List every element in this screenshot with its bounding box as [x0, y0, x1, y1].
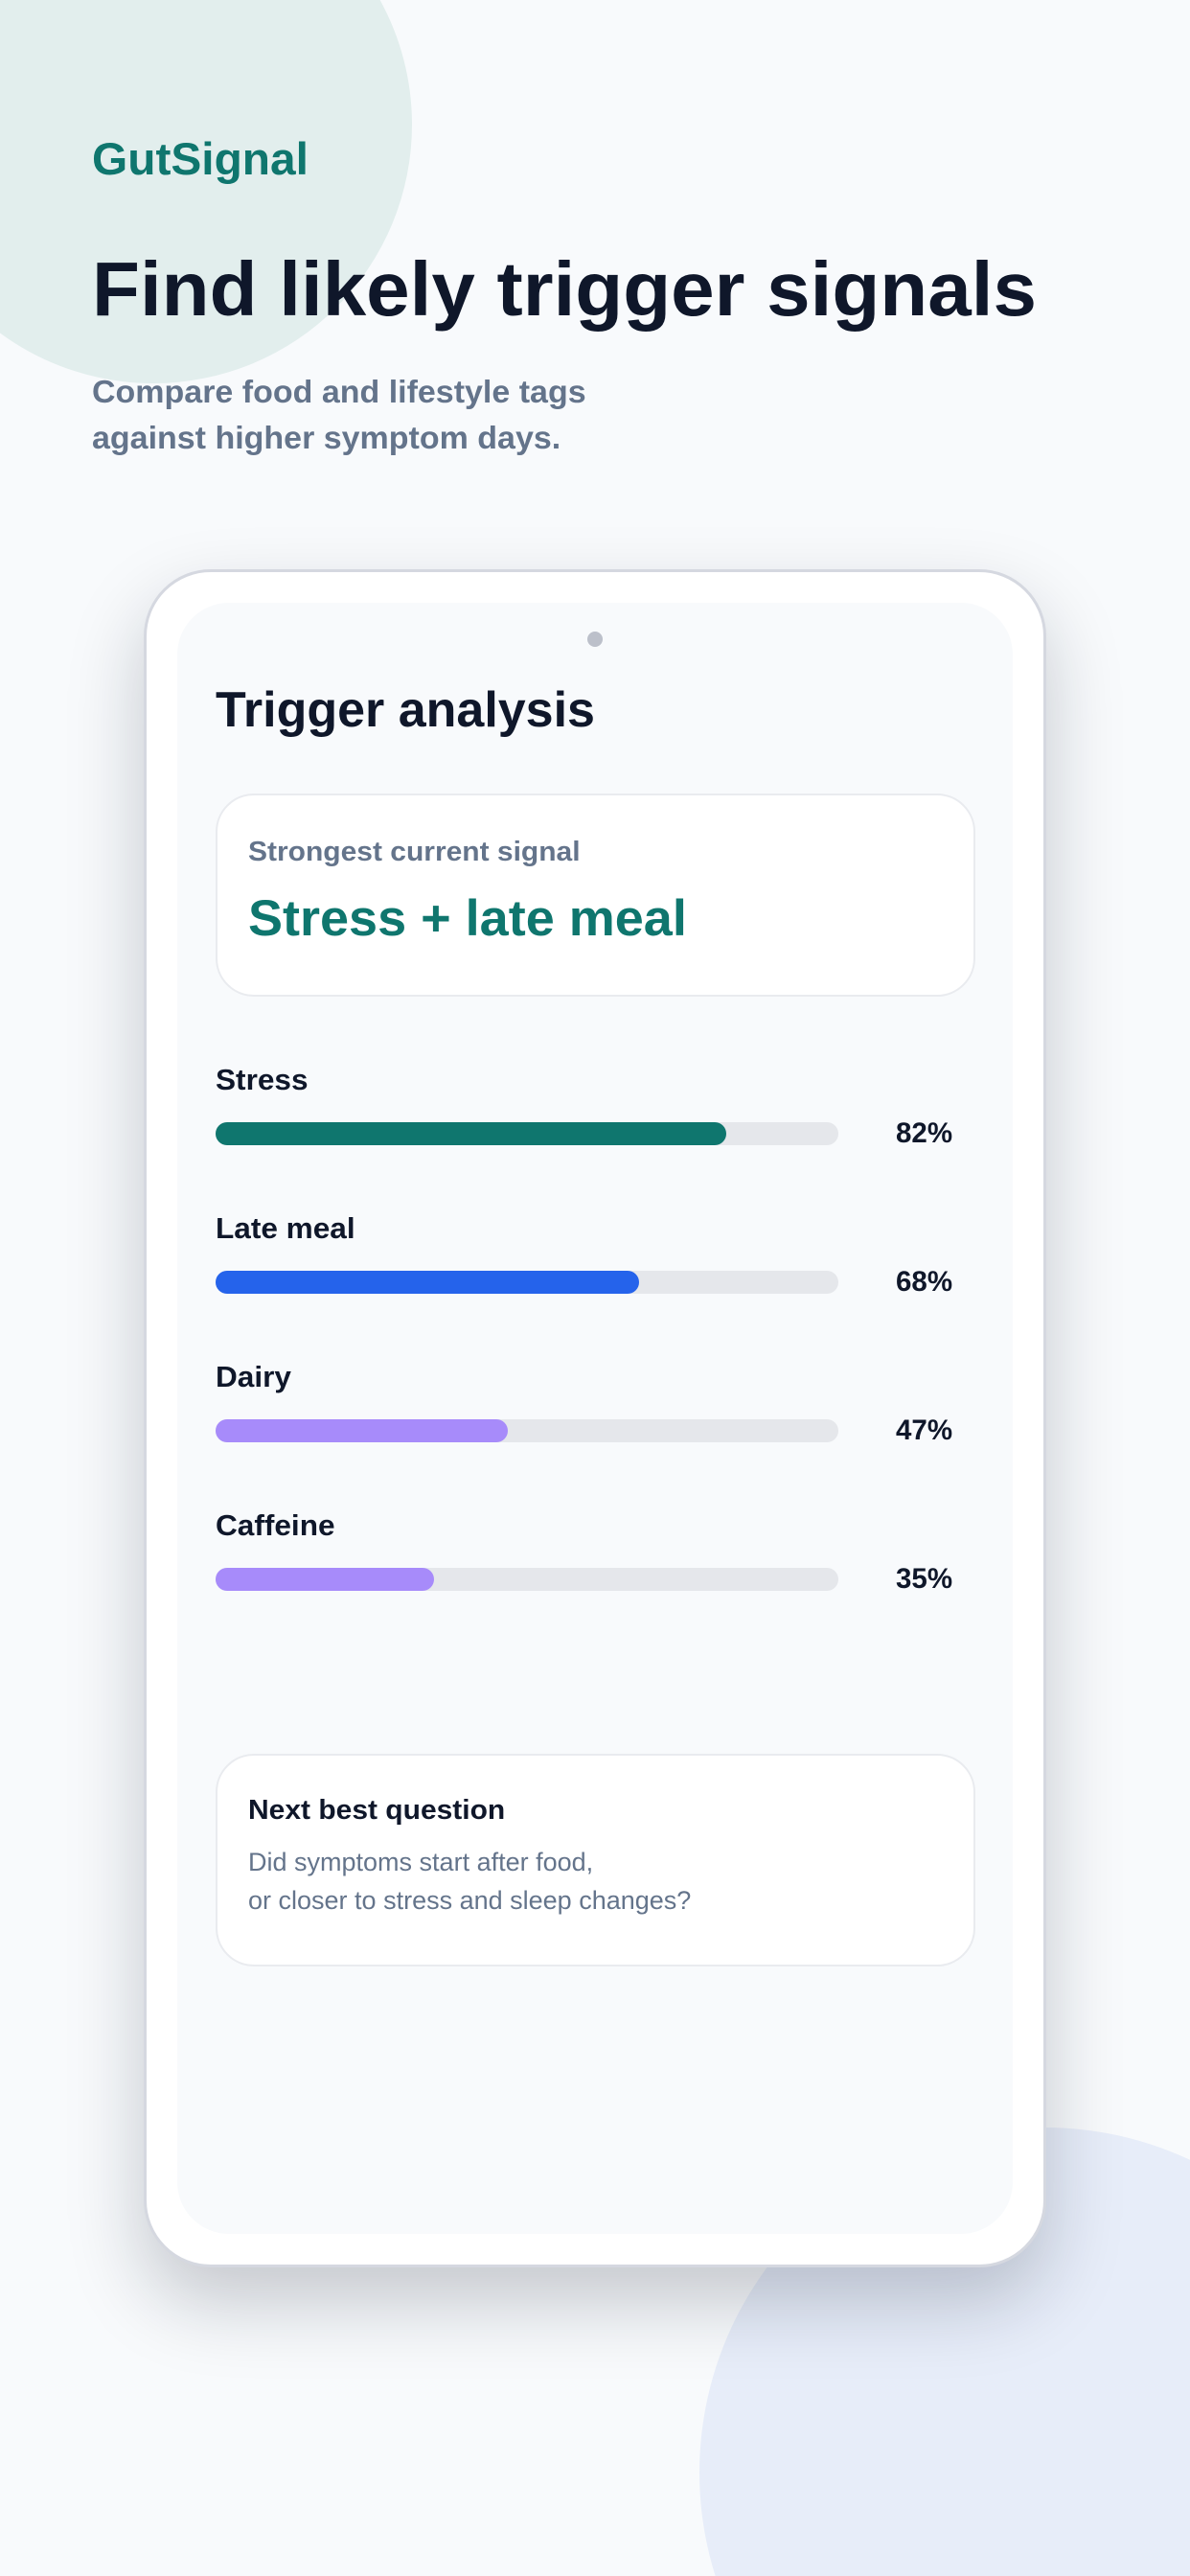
- card: strongest signal: [216, 794, 975, 997]
- bar row: Late meal: 68%: [896, 1266, 952, 1298]
- bar row: Dairy: 47%: [896, 1414, 952, 1446]
- bar row: Dairy: Dairy: [216, 1361, 291, 1393]
- decorative circle: bottom right: [699, 2128, 1190, 2576]
- bar row: Late meal: Late meal: [216, 1212, 355, 1245]
- question body: Did symptoms start after food,: [248, 1848, 593, 1876]
- panel: phone screen: [177, 603, 1013, 2234]
- bar row: Stress: [216, 1064, 952, 1149]
- subtitle: Compare food and lifestyle tags: [92, 374, 586, 409]
- bar row: Caffeine: 35%: [896, 1563, 952, 1595]
- screen heading: Trigger analysis: [216, 682, 595, 738]
- question body: [248, 1848, 691, 1915]
- bar row: Stress: 82%: [896, 1117, 952, 1149]
- brand name: GutSignal: [92, 133, 309, 184]
- bar chart: trigger signals: [216, 1064, 952, 1595]
- bar row: Dairy: [216, 1361, 952, 1446]
- panel: phone frame: [144, 569, 1046, 2267]
- subtitle: against higher symptom days.: [92, 420, 561, 455]
- question body: or closer to stress and sleep changes?: [248, 1886, 691, 1915]
- bar row: Stress: Stress: [216, 1064, 309, 1096]
- title: Find likely trigger signals: [92, 246, 1037, 332]
- decorative circle: top left: [0, 0, 412, 383]
- question heading: Next best question: [248, 1795, 505, 1826]
- bar row: Caffeine: Caffeine: [216, 1509, 335, 1542]
- card: next best question: [216, 1754, 975, 1966]
- camera dot: [587, 632, 603, 647]
- card label: Strongest current signal: [248, 837, 581, 867]
- bar row: Late meal: [216, 1212, 952, 1298]
- card value: Stress + late meal: [248, 890, 687, 947]
- bar row: Caffeine: [216, 1509, 952, 1595]
- subtitle: [92, 374, 586, 455]
